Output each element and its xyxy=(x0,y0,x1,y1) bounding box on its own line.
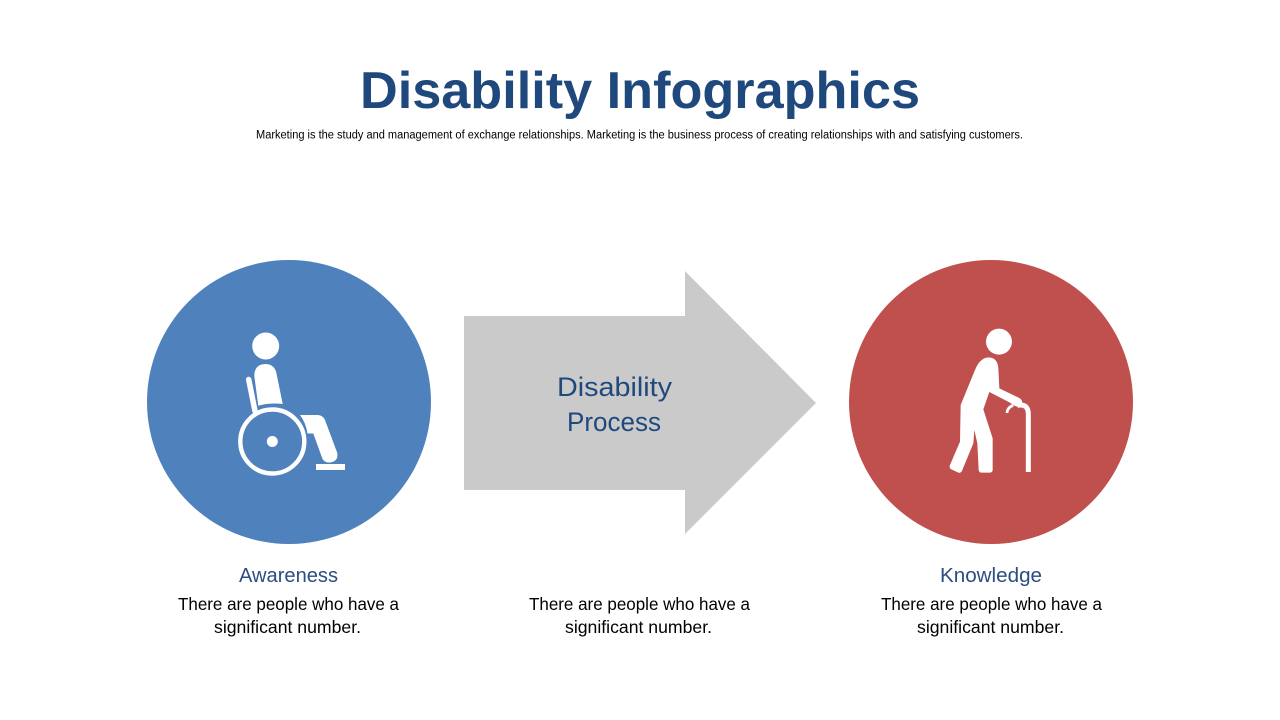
panel: awareness xyxy=(147,260,431,637)
arrow label: Process xyxy=(567,407,661,437)
subtitle text: Marketing is the study and management of exchange relationships. Marketing is the business process of creating relationships with and satisfying customers. xyxy=(256,130,1023,142)
panel: knowledge xyxy=(849,260,1133,637)
icon: elderly person with cane xyxy=(950,329,1028,473)
label: awareness: Awareness xyxy=(239,565,338,587)
panel: process xyxy=(464,271,816,637)
label: knowledge: Knowledge xyxy=(940,565,1042,587)
text block: knowledge description xyxy=(881,594,1102,637)
title: Disability Infographics xyxy=(360,62,920,120)
circle: knowledge xyxy=(849,260,1133,544)
arrow label: Disability xyxy=(557,372,673,402)
circle: awareness xyxy=(147,260,431,544)
icon: wheelchair user xyxy=(240,332,345,474)
arrow xyxy=(464,271,816,534)
text block: awareness description: significant number. xyxy=(214,617,361,637)
text block: process description: significant number. xyxy=(565,617,712,637)
text block: knowledge description: significant number. xyxy=(917,617,1064,637)
text block: knowledge description: There are people who have a xyxy=(881,594,1102,614)
text block: awareness description xyxy=(178,594,399,637)
arrow label xyxy=(557,372,673,437)
text block: process description: There are people who have a xyxy=(529,594,750,614)
text block: process description xyxy=(529,594,750,637)
text block: awareness description: There are people who have a xyxy=(178,594,399,614)
